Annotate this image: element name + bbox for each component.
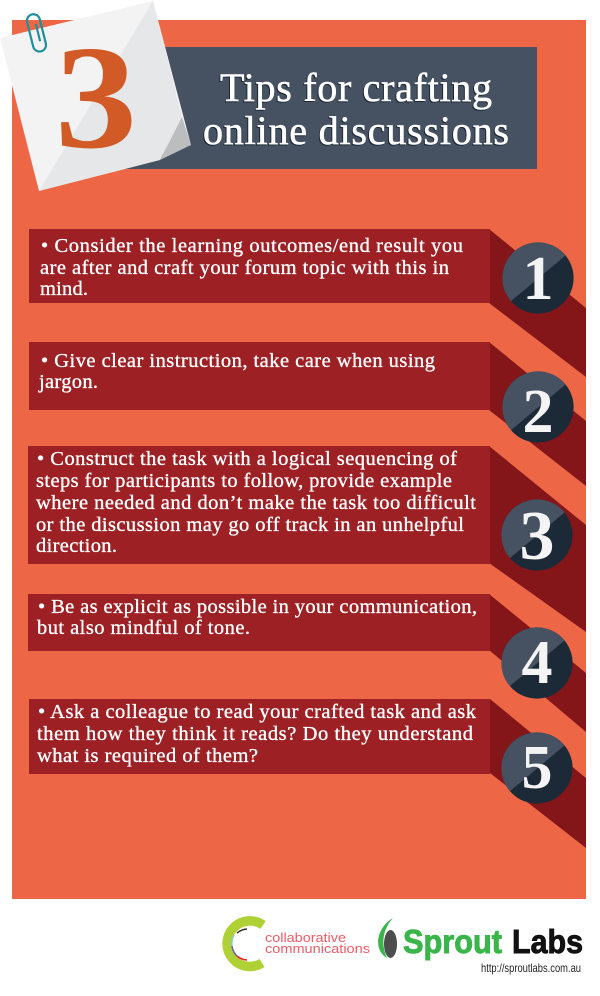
tip 2 [29,342,586,486]
tip 3: • Construct the task with a logical sequencing of [37,448,457,470]
tip 1: mind. [40,278,88,300]
tip 2: jargon. [38,371,98,393]
tip 5: them how they think it reads? Do they understand [37,723,473,745]
tip 1: are after and craft your forum topic with this in [40,257,449,279]
title banner: Tips for crafting [220,65,492,110]
logo: collaborative communications [227,921,371,966]
tip 2: • Give clear instruction, take care when using [41,350,435,372]
logo: Sprout Labs: Labs [512,923,583,960]
tip 3 [28,446,589,632]
title banner [120,47,537,169]
tip 1: 1 [522,245,554,313]
sticky note with number 3 [0,1,191,191]
tip 5 [29,688,589,848]
tip 3: or the discussion may go off track in an unhelpful [36,514,464,536]
tip 5: • Ask a colleague to read your crafted task and ask [38,701,477,723]
sticky note with number 3: 3 [55,15,137,179]
tip 4: • Be as explicit as possible in your communication, [38,596,477,618]
tip 3: 3 [520,498,554,575]
tip 2: 2 [522,378,554,446]
tip 3: steps for participants to follow, provide example [36,470,452,492]
tip 4: but also mindful of tone. [37,617,250,639]
logo: collaborative communications: communications [265,941,371,956]
tip 4: 4 [522,629,552,697]
tip 1 [29,229,586,377]
tip 5: what is required of them? [37,745,258,767]
logo: collaborative communications: collaborative [265,930,346,945]
logo: Sprout Labs [378,918,583,975]
tip 3: direction. [36,535,117,557]
logo: Sprout Labs: Sprout [403,923,502,960]
tip 4 [28,583,589,732]
tip 5: 5 [522,734,552,802]
title banner: online discussions [203,108,509,153]
tip 3: where needed and don’t make the task too difficult [36,492,476,514]
tip 1: • Consider the learning outcomes/end result you [41,235,463,257]
icon: paperclip [26,13,47,53]
